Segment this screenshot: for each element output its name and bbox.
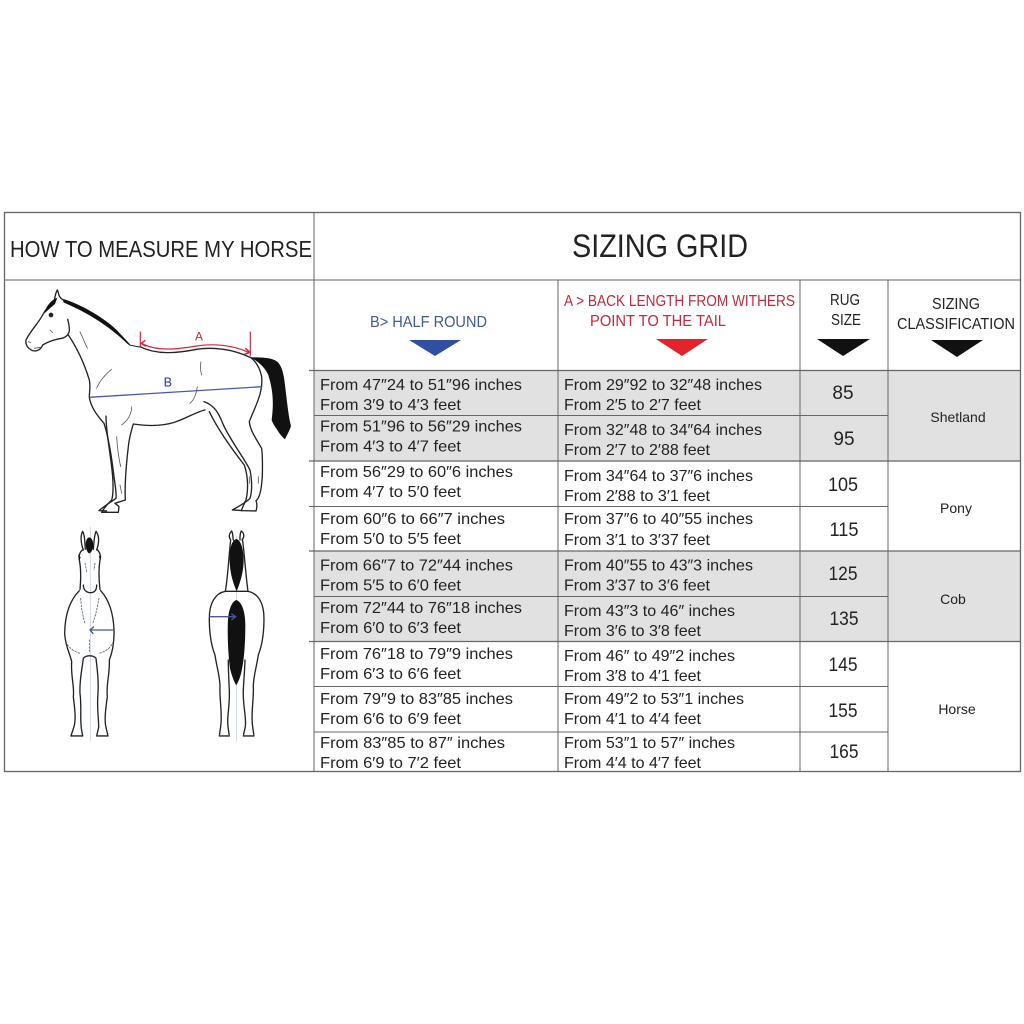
rug size column values: 155 (828, 701, 858, 722)
icon: horse side view with measurements A and B (26, 290, 291, 512)
column header: rug size (817, 292, 870, 356)
half round column values: From 47″24 to 51″96 inches (320, 377, 522, 394)
back length column values: From 3′6 to 3′8 feet (564, 623, 702, 640)
rug size column values: 165 (830, 742, 858, 763)
back length column values: From 40″55 to 43″3 inches (564, 558, 753, 574)
sizing classification values (930, 409, 986, 717)
column header: back length: POINT TO THE TAIL (590, 313, 726, 330)
sizing classification values: Shetland (930, 409, 986, 425)
sizing classification values: Cob (940, 591, 966, 607)
grey band: Shetland rows (314, 370, 1020, 461)
back length column values (564, 377, 762, 772)
back length column values: From 34″64 to 37″6 inches (564, 468, 753, 485)
half round column values: From 51″96 to 56″29 inches (320, 418, 522, 436)
back length column values: From 4′4 to 4′7 feet (564, 755, 702, 772)
icon: horse side view with measurements A and B: B (164, 376, 172, 390)
half round column values: From 6′0 to 6′3 feet (320, 620, 462, 637)
back length column values: From 3′37 to 3′6 feet (564, 578, 711, 594)
half round column values: From 60″6 to 66″7 inches (320, 511, 505, 528)
rug size column values: 105 (828, 475, 858, 496)
back length column values: From 3′1 to 3′37 feet (564, 532, 711, 549)
icon: horse front view with half round arrow (65, 527, 114, 742)
icon: horse side view with measurements A and B: A (195, 329, 203, 343)
column header: half round (370, 314, 487, 356)
back length column values: From 43″3 to 46″ inches (564, 603, 735, 620)
rug size column values: 125 (828, 564, 858, 585)
column header: back length (564, 293, 795, 356)
half round column values: From 56″29 to 60″6 inches (320, 464, 513, 481)
back length column values: From 53″1 to 57″ inches (564, 735, 735, 752)
back length column values: From 46″ to 49″2 inches (564, 648, 735, 665)
column header: sizing classification: CLASSIFICATION (897, 316, 1015, 333)
rug size column values: 115 (830, 520, 858, 541)
half round column values: From 6′6 to 6′9 feet (320, 711, 462, 728)
half round column values: From 3′9 to 4′3 feet (320, 397, 462, 414)
back length column values: From 37″6 to 40″55 inches (564, 511, 753, 528)
half round column values: From 6′3 to 6′6 feet (320, 666, 462, 683)
half round column values: From 83″85 to 87″ inches (320, 735, 505, 752)
sizing classification values: Pony (940, 500, 972, 516)
column header: rug size: SIZE (831, 312, 861, 329)
back length column values: From 29″92 to 32″48 inches (564, 377, 762, 394)
half round column values: From 72″44 to 76″18 inches (320, 600, 522, 617)
back length column values: From 49″2 to 53″1 inches (564, 691, 744, 708)
half round column values: From 79″9 to 83″85 inches (320, 691, 513, 708)
half round column values: From 5′5 to 6′0 feet (320, 578, 462, 594)
half round column values: From 4′3 to 4′7 feet (320, 438, 462, 456)
icon: horse rear view with half round arrow (209, 531, 264, 742)
sizing classification values: Horse (938, 701, 976, 717)
back length column values: From 2′5 to 2′7 feet (564, 397, 702, 414)
half round column values: From 66″7 to 72″44 inches (320, 558, 513, 574)
column header: half round: B> HALF ROUND (370, 314, 487, 331)
heading: how to measure: HOW TO MEASURE MY HORSE (10, 236, 312, 262)
back length column values: From 3′8 to 4′1 feet (564, 668, 702, 685)
column header: sizing classification: SIZING (932, 296, 980, 313)
half round column values (320, 377, 522, 772)
back length column values: From 2′88 to 3′1 feet (564, 488, 711, 505)
rug size column values: 95 (833, 429, 855, 450)
rug size column values: 85 (832, 383, 854, 404)
half round column values: From 5′0 to 5′5 feet (320, 531, 462, 548)
grey band: Cob rows (314, 551, 1020, 641)
half round column values: From 76″18 to 79″9 inches (320, 646, 513, 663)
rug size column values: 145 (828, 655, 858, 676)
heading: sizing grid: SIZING GRID (572, 228, 748, 264)
column header: back length: A > BACK LENGTH FROM WITHERS (564, 293, 795, 310)
back length column values: From 2′7 to 2′88 feet (564, 442, 711, 459)
half round column values: From 6′9 to 7′2 feet (320, 755, 462, 772)
column header: sizing classification (897, 296, 1015, 357)
rug size column values: 135 (830, 609, 858, 630)
column header: rug size: RUG (830, 292, 860, 309)
rug size column values (828, 383, 858, 763)
back length column values: From 32″48 to 34″64 inches (564, 422, 762, 439)
half round column values: From 4′7 to 5′0 feet (320, 484, 462, 501)
back length column values: From 4′1 to 4′4 feet (564, 711, 702, 728)
